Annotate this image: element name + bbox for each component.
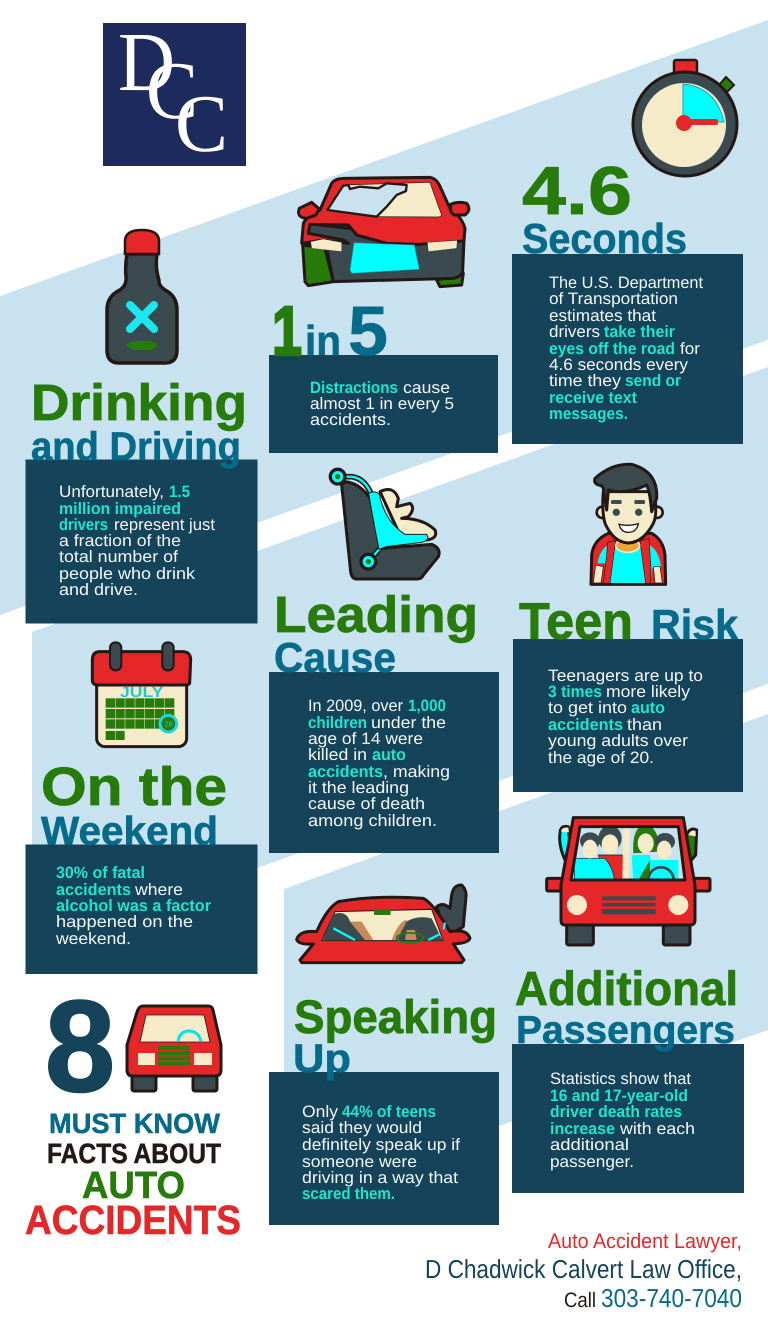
body text: 1,000 xyxy=(408,697,446,715)
body text: Distractions xyxy=(310,379,398,397)
body text: where xyxy=(134,881,183,899)
icon: bottle xyxy=(107,230,177,363)
body text: receive text xyxy=(549,389,637,407)
body text: The U.S. Department xyxy=(549,274,703,292)
icon: car full of passengers xyxy=(547,818,710,945)
body text: estimates that xyxy=(549,307,656,325)
body text: cause xyxy=(403,379,450,397)
body text: than xyxy=(627,716,662,734)
logo: DCC monogram: C xyxy=(146,45,198,136)
logo: DCC monogram xyxy=(103,16,246,169)
panel: drinking and driving xyxy=(26,230,258,624)
body text: accidents xyxy=(56,881,131,899)
heading: Weekend: Weekend xyxy=(41,810,218,854)
body text xyxy=(308,697,450,830)
body text: eyes off the road xyxy=(549,340,675,358)
body text: drivers xyxy=(549,323,600,341)
body text: said they would xyxy=(302,1119,422,1137)
icon: front view car xyxy=(127,1006,221,1091)
text box xyxy=(513,639,743,792)
body text: accidents xyxy=(308,763,383,781)
body text: driving in a way that xyxy=(302,1169,458,1187)
body text: weekend. xyxy=(55,930,131,948)
body text: increase xyxy=(550,1120,615,1138)
body text: the age of 20. xyxy=(548,749,654,767)
text box xyxy=(269,355,498,453)
text box xyxy=(26,460,258,624)
body text: cause of death xyxy=(308,795,425,813)
body text: total number of xyxy=(59,548,178,566)
body text: it the leading xyxy=(308,779,409,797)
heading: Teen: Teen xyxy=(519,593,633,651)
footer: law office contact: Auto Accident Lawyer, xyxy=(548,1230,742,1253)
logo: DCC monogram: D xyxy=(118,16,175,109)
icon: teen with backpack xyxy=(591,464,666,584)
body text: with each xyxy=(619,1120,695,1138)
heading: and Driving: and Driving xyxy=(31,425,241,469)
heading: Speaking: Speaking xyxy=(294,990,497,1043)
body text xyxy=(548,667,703,767)
body text: million impaired xyxy=(59,500,181,518)
body text: accidents xyxy=(548,716,623,734)
text box xyxy=(269,1072,499,1225)
footer: law office contact xyxy=(425,1230,742,1313)
number 8: 8 xyxy=(45,973,115,1119)
heading: 4.6: 4.6 xyxy=(522,153,632,229)
heading: Cause: Cause xyxy=(274,634,396,681)
body text: In 2009, over xyxy=(308,697,403,715)
body text xyxy=(55,864,212,948)
body text: passenger. xyxy=(550,1153,634,1171)
body text: 3 times xyxy=(548,683,602,701)
body text: accidents. xyxy=(310,411,391,429)
body text: alcohol was a factor xyxy=(56,897,212,915)
panel: on the weekend xyxy=(26,642,258,974)
body text: young adults over xyxy=(548,732,689,750)
footer: law office contact: 303-740-7040 xyxy=(601,1283,742,1313)
body text: definitely speak up if xyxy=(302,1136,460,1154)
body text: age of 14 were xyxy=(308,730,423,748)
body text: messages. xyxy=(549,405,628,423)
body text: auto xyxy=(372,746,406,764)
body text: children xyxy=(308,714,367,732)
text: auto: AUTO xyxy=(82,1165,185,1207)
logo: DCC monogram: C xyxy=(175,78,228,169)
body text: , making xyxy=(383,763,450,781)
body text: a fraction of the xyxy=(59,532,181,550)
body text: represent just xyxy=(114,516,215,534)
text box xyxy=(26,844,258,974)
body text xyxy=(550,1070,695,1171)
body text: 1.5 xyxy=(169,483,190,501)
body text xyxy=(302,1103,460,1203)
body text: drivers xyxy=(59,516,108,534)
heading: Passengers: Passengers xyxy=(516,1009,735,1052)
body text: time they xyxy=(549,372,622,390)
heading: Drinking: Drinking xyxy=(31,374,247,431)
body text xyxy=(549,274,703,423)
body text: people who drink xyxy=(59,565,196,583)
body text: additional xyxy=(550,1136,629,1154)
icon: child car seat xyxy=(330,469,439,579)
body text: almost 1 in every 5 xyxy=(310,395,454,413)
body text: 44% of teens xyxy=(342,1103,436,1121)
body text: send or xyxy=(625,372,682,390)
heading: Additional: Additional xyxy=(515,963,738,1016)
text: must know: MUST KNOW xyxy=(49,1108,221,1139)
body text: scared them. xyxy=(302,1185,395,1203)
panel: leading cause xyxy=(269,469,499,853)
text: facts about: FACTS ABOUT xyxy=(47,1138,221,1169)
body text xyxy=(59,483,215,599)
panel: 1 in 5 xyxy=(269,177,498,453)
body text: Statistics show that xyxy=(550,1070,691,1088)
icon: July calendar: JULY xyxy=(120,684,163,700)
text: accidents: ACCIDENTS xyxy=(25,1197,241,1243)
body text: auto xyxy=(631,699,665,717)
heading: 1 in 5: in xyxy=(305,317,341,364)
text box xyxy=(512,254,743,444)
body text: happened on the xyxy=(56,913,193,931)
body text: 16 and 17-year-old xyxy=(550,1087,688,1105)
title block: 8 must know facts about auto accidents xyxy=(25,973,241,1243)
icon: crashed car xyxy=(299,177,469,287)
icon: stopwatch xyxy=(633,60,737,176)
body text: 30% of fatal xyxy=(56,864,145,882)
body text: among children. xyxy=(308,812,437,830)
body text: Unfortunately, xyxy=(59,483,164,501)
heading: 1 in 5 xyxy=(272,292,388,370)
body text: and drive. xyxy=(59,581,138,599)
heading: 1 in 5: 5 xyxy=(348,292,388,370)
body text: Teenagers are up to xyxy=(548,667,703,685)
body text: someone were xyxy=(302,1153,417,1171)
text box xyxy=(512,1044,744,1193)
body text xyxy=(310,379,454,429)
body text: to get into xyxy=(548,699,627,717)
heading: Leading: Leading xyxy=(274,586,478,643)
icon: car with raised arm xyxy=(297,885,470,963)
panel: additional passengers xyxy=(512,818,744,1193)
body text: for xyxy=(680,340,701,358)
heading: On the: On the xyxy=(41,757,227,817)
body text: driver death rates xyxy=(550,1103,682,1121)
panel: 4.6 seconds xyxy=(512,60,743,444)
icon: July calendar xyxy=(92,642,191,747)
body text: of Transportation xyxy=(549,290,678,308)
heading: Up: Up xyxy=(293,1037,351,1081)
body text: under the xyxy=(371,714,446,732)
body text: 4.6 seconds every xyxy=(549,356,689,374)
panel: teen risk xyxy=(513,464,743,792)
heading: Risk: Risk xyxy=(651,601,739,648)
heading: 1 in 5: 1 xyxy=(272,292,302,370)
body text: Only xyxy=(302,1103,339,1121)
heading: Seconds: Seconds xyxy=(522,215,687,262)
icon: July calendar: 28 xyxy=(165,720,173,728)
body text: more likely xyxy=(606,683,691,701)
text box xyxy=(269,672,499,853)
footer: law office contact: Call xyxy=(564,1289,596,1312)
panel: speaking up xyxy=(269,885,499,1225)
body text: take their xyxy=(604,323,676,341)
body text: killed in xyxy=(308,746,367,764)
